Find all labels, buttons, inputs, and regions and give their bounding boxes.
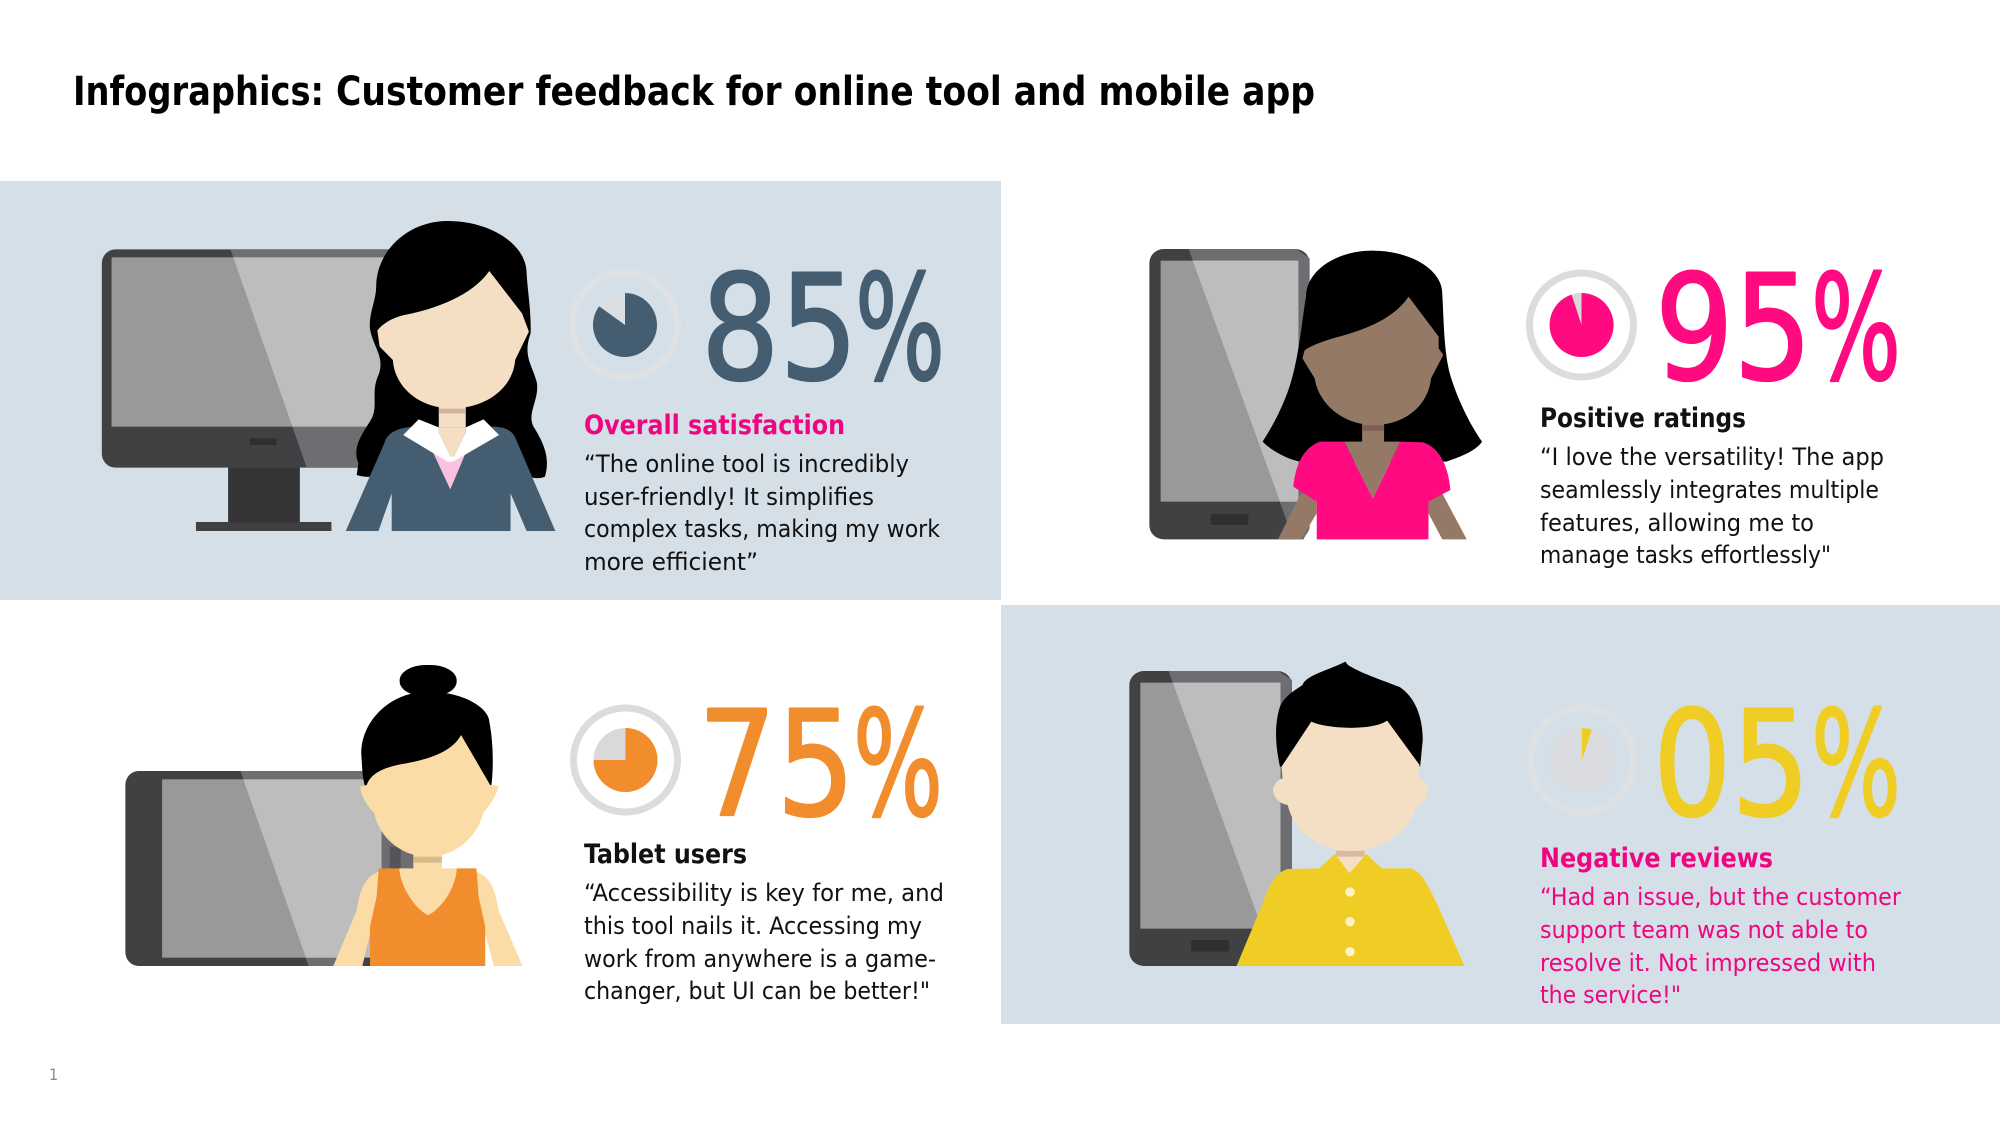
text block: positive ratings: seamlessly integrates multiple xyxy=(1540,476,1879,504)
text block: positive ratings: “I love the versatility! The app xyxy=(1540,443,1884,471)
illustration: landscape tablet and woman with bun xyxy=(125,665,523,966)
text block: positive ratings: features, allowing me to xyxy=(1540,509,1814,537)
illustration: tablet portrait and woman in pink top xyxy=(1149,249,1482,539)
figure: woman with long black hair xyxy=(346,221,555,531)
text block: positive ratings: manage tasks effortlessly" xyxy=(1540,541,1831,569)
illustration: desktop monitor and woman in suit xyxy=(102,221,555,531)
statistic: 05%: % xyxy=(1811,680,1901,850)
statistic: 05% xyxy=(1653,680,1901,850)
illustration: phone and man in yellow shirt xyxy=(1129,662,1465,966)
statistic: 85% xyxy=(701,244,945,414)
stat icon: 85% pie xyxy=(572,272,678,378)
statistic: 05%: 05 xyxy=(1653,680,1810,850)
statistic: 75%: 75 xyxy=(698,680,855,850)
icon: phone tablet xyxy=(1149,249,1310,539)
panel: negative reviews background xyxy=(1001,605,2000,1024)
text block: overall satisfaction: complex tasks, making my work xyxy=(584,515,941,543)
text block: overall satisfaction xyxy=(584,410,941,576)
text block: tablet users: Tablet users xyxy=(584,839,747,870)
statistic: 85%: 85 xyxy=(701,244,858,414)
statistic: 75%: % xyxy=(853,680,943,850)
icon: phone tablet xyxy=(1129,671,1292,966)
text block: tablet users xyxy=(584,839,944,1005)
text block: positive ratings xyxy=(1540,403,1884,569)
text block: negative reviews: resolve it. Not impressed with xyxy=(1540,949,1876,977)
text block: tablet users: work from anywhere is a game- xyxy=(584,945,936,973)
figure: woman with dark skin and pink top xyxy=(1263,251,1482,539)
text block: overall satisfaction: “The online tool is incredibly xyxy=(584,450,909,478)
text block: overall satisfaction: user-friendly! It simplifies xyxy=(584,483,874,511)
statistic: 95%: 95 xyxy=(1655,244,1812,414)
icon: landscape tablet xyxy=(125,771,413,966)
statistic: 75% xyxy=(698,680,943,850)
text block: tablet users: changer, but UI can be better!" xyxy=(584,977,930,1005)
figure: woman with hair bun and orange top xyxy=(333,665,523,966)
text block: tablet users: this tool nails it. Accessing my xyxy=(584,912,922,940)
text block: negative reviews: support team was not able to xyxy=(1540,916,1868,944)
statistic: 95%: % xyxy=(1811,244,1901,414)
title: Infographics: xyxy=(73,69,324,115)
text block: tablet users: “Accessibility is key for me, and xyxy=(584,879,944,907)
title: Customer feedback for online tool and mobile app xyxy=(336,69,1315,115)
statistic: 95% xyxy=(1655,244,1901,414)
text block: negative reviews: the service!" xyxy=(1540,981,1681,1009)
text block: overall satisfaction: more efficient” xyxy=(584,548,758,576)
text block: negative reviews xyxy=(1540,843,1901,1009)
page number: 1 xyxy=(49,1065,58,1084)
statistic: 85%: % xyxy=(855,244,945,414)
stat icon: 05% pie xyxy=(1530,708,1634,812)
icon: desktop monitor xyxy=(102,249,406,531)
stat icon: 95% pie xyxy=(1530,273,1634,377)
panel: overall satisfaction background xyxy=(0,181,1001,600)
text block: overall satisfaction: Overall satisfaction xyxy=(584,410,845,441)
text block: negative reviews: Negative reviews xyxy=(1540,843,1773,874)
stat icon: 75% pie xyxy=(574,708,678,812)
text block: negative reviews: “Had an issue, but the customer xyxy=(1540,883,1901,911)
text block: positive ratings: Positive ratings xyxy=(1540,403,1746,434)
figure: man with black hair and yellow shirt xyxy=(1237,662,1465,966)
